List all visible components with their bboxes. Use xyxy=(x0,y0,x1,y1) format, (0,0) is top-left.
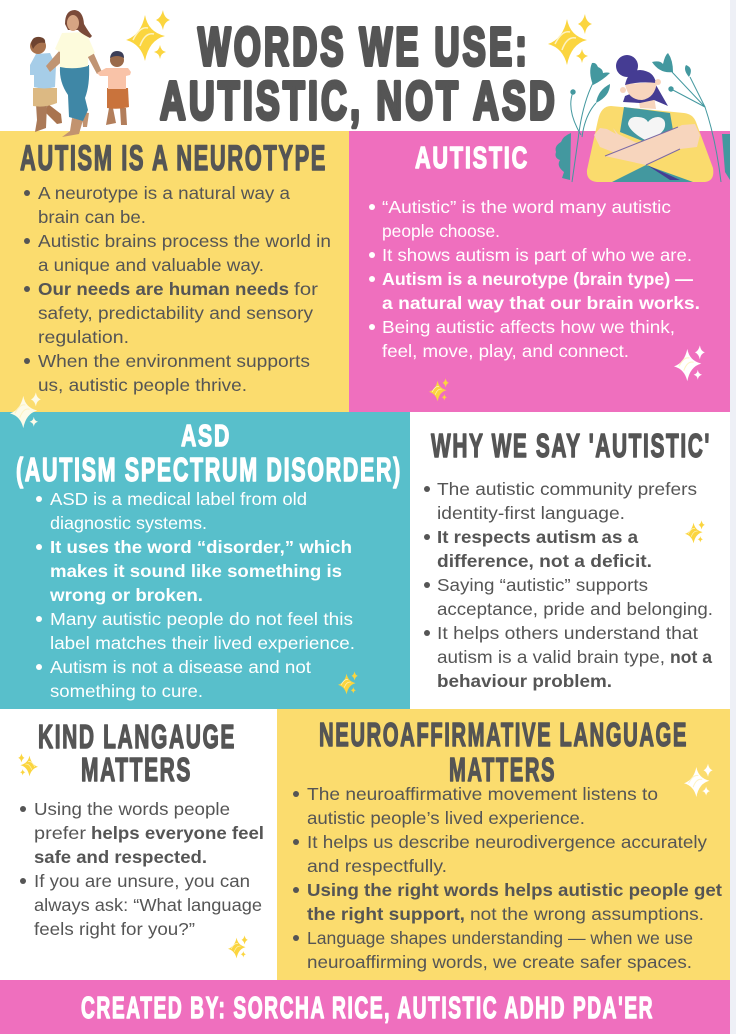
bullet list: neurotype xyxy=(24,183,331,395)
bullet list: neuroaffirmative: the right support, xyxy=(307,904,465,924)
footer banner xyxy=(0,980,730,1034)
bullet list: why: Saying “autistic” supports xyxy=(437,575,648,595)
bullet list: why: difference, not a deficit. xyxy=(437,551,652,571)
bullet list: kind language: helps everyone feel xyxy=(91,823,264,843)
bullet list: why: not a xyxy=(670,647,712,667)
bullet list: neuroaffirmative: autistic people’s lived experience. xyxy=(307,808,585,828)
bullet list: asd: makes it sound like something is xyxy=(50,561,342,581)
bullet list: autistic: “Autistic” is the word many autistic xyxy=(382,197,671,217)
heading: kind language matters: MATTERS xyxy=(81,751,192,788)
bullet list: neuroaffirmative: neuroaffirming words, we create safer spaces. xyxy=(307,952,692,972)
bullet list: autistic: It shows autism is part of who we are. xyxy=(382,245,692,265)
bullet list: why: The autistic community prefers xyxy=(437,479,697,499)
icon: sparkle neuroaffirmative xyxy=(684,764,713,797)
icon: sparkle asd bottom xyxy=(338,671,358,694)
bullet list: neurotype: brain can be. xyxy=(38,207,146,227)
panel: neuroaffirmative language matters xyxy=(277,709,730,980)
icon: sparkle asd corner xyxy=(10,392,41,428)
bullet list: why: identity-first language. xyxy=(437,503,625,523)
bullet list: autistic: feel, move, play, and connect. xyxy=(382,341,629,361)
bullet list: kind language: feels right for you?” xyxy=(34,919,195,939)
icon: sparkle title right xyxy=(548,14,592,65)
heading: asd: (AUTISM SPECTRUM DISORDER) xyxy=(16,451,402,488)
bullet list: why: It respects autism as a xyxy=(437,527,638,547)
bullet list: autistic xyxy=(369,197,700,361)
icon: sparkle title left xyxy=(126,10,170,61)
bullet list: autistic: Autism is a neurotype (brain type) — xyxy=(382,269,694,289)
bullet list: kind language: Using the words people xyxy=(34,799,230,819)
bullet list: neurotype: Autistic brains process the world in xyxy=(38,231,331,251)
bullet list: asd: It uses the word “disorder,” which xyxy=(50,537,352,557)
bullet list: neurotype: regulation. xyxy=(38,327,129,347)
heading: neuroaffirmative language matters xyxy=(319,716,688,788)
bullet list: asd: diagnostic systems. xyxy=(50,513,207,533)
bullet list: neurotype: for xyxy=(294,279,318,299)
heading: asd xyxy=(16,418,402,488)
heading: neuroaffirmative language matters: MATTERS xyxy=(449,751,556,788)
hair and face xyxy=(638,96,656,109)
icon: sparkle why panel xyxy=(685,520,705,543)
crossed arms xyxy=(605,124,700,165)
title xyxy=(160,17,558,131)
heading: kind language matters xyxy=(38,718,236,788)
bullet list: why: behaviour problem. xyxy=(437,671,612,691)
bullet list: neuroaffirmative: not the wrong assumptions. xyxy=(470,904,704,924)
bullet list: neurotype: When the environment supports xyxy=(38,351,310,371)
bullet list: asd: ASD is a medical label from old xyxy=(50,489,307,509)
bullet list: neuroaffirmative: Using the right words helps autistic people get xyxy=(307,880,722,900)
bullet list: neuroaffirmative: The neuroaffirmative movement listens to xyxy=(307,784,658,804)
icon: woman hugging herself with leaves xyxy=(556,53,730,182)
bullet list: neuroaffirmative: Language shapes understanding — when we use xyxy=(307,928,693,948)
bullet list: asd: Autism is not a disease and not xyxy=(50,657,311,677)
bullet list: kind language xyxy=(20,799,264,939)
bullet list: neurotype: us, autistic people thrive. xyxy=(38,375,247,395)
bullet list: kind language: If you are unsure, you can xyxy=(34,871,250,891)
bullet list: why: autism is a valid brain type, xyxy=(437,647,665,667)
bullet list: asd: label matches their lived experience. xyxy=(50,633,355,653)
bullet list: neuroaffirmative: and respectfully. xyxy=(307,856,447,876)
bullet list: why: It helps others understand that xyxy=(437,623,698,643)
body xyxy=(587,106,713,182)
bullet list: autistic: Being autistic affects how we think, xyxy=(382,317,675,337)
icon: sparkle autistic yellow xyxy=(429,378,449,401)
title: WORDS WE USE: xyxy=(198,17,530,77)
heart xyxy=(628,117,665,141)
icon: sparkle kind bottom xyxy=(228,935,248,958)
panel: autistic xyxy=(349,131,730,412)
bullet list: neurotype: Our needs are human needs xyxy=(38,279,289,299)
heading: autistic: AUTISTIC xyxy=(415,140,529,175)
panel: kind language matters xyxy=(0,709,277,980)
leaves and stems xyxy=(556,53,730,182)
bullet list: why xyxy=(424,479,713,691)
bullet list: asd: something to cure. xyxy=(50,681,203,701)
right boy xyxy=(97,51,131,125)
bullet list: autistic: people choose. xyxy=(382,221,500,241)
heading: autism is a neurotype: AUTISM IS A NEUROTYPE xyxy=(20,139,327,178)
panel: asd xyxy=(0,412,410,709)
bullet list: asd xyxy=(36,489,355,701)
bullet list: neuroaffirmative xyxy=(293,784,722,972)
heading: asd: ASD xyxy=(181,418,231,453)
bullet list: autistic: a natural way that our brain works. xyxy=(382,293,700,313)
bullet list: asd: Many autistic people do not feel this xyxy=(50,609,353,629)
bullet list: kind language: prefer xyxy=(34,823,86,843)
icon: sparkle kind top xyxy=(18,753,38,776)
bullet list: asd: wrong or broken. xyxy=(49,585,203,605)
bullet list: neurotype: safety, predictability and sensory xyxy=(38,303,313,323)
panel: why we say autistic xyxy=(410,412,730,709)
icon: family walking xyxy=(30,10,131,137)
icon: sparkle autistic white xyxy=(674,345,705,381)
left boy xyxy=(30,37,62,132)
bullet list: neuroaffirmative: It helps us describe neurodivergence accurately xyxy=(307,832,707,852)
heading: kind language matters: KIND LANGAUGE xyxy=(38,718,236,755)
bullet list: neurotype: A neurotype is a natural way a xyxy=(38,183,290,203)
bullet list: neurotype: a unique and valuable way. xyxy=(38,255,264,275)
panel: autism is a neurotype xyxy=(0,131,349,412)
bullet list: kind language: safe and respected. xyxy=(34,847,207,867)
mother xyxy=(46,10,102,137)
bullet list: why: acceptance, pride and belonging. xyxy=(437,599,713,619)
bullet list: kind language: always ask: “What language xyxy=(34,895,262,915)
